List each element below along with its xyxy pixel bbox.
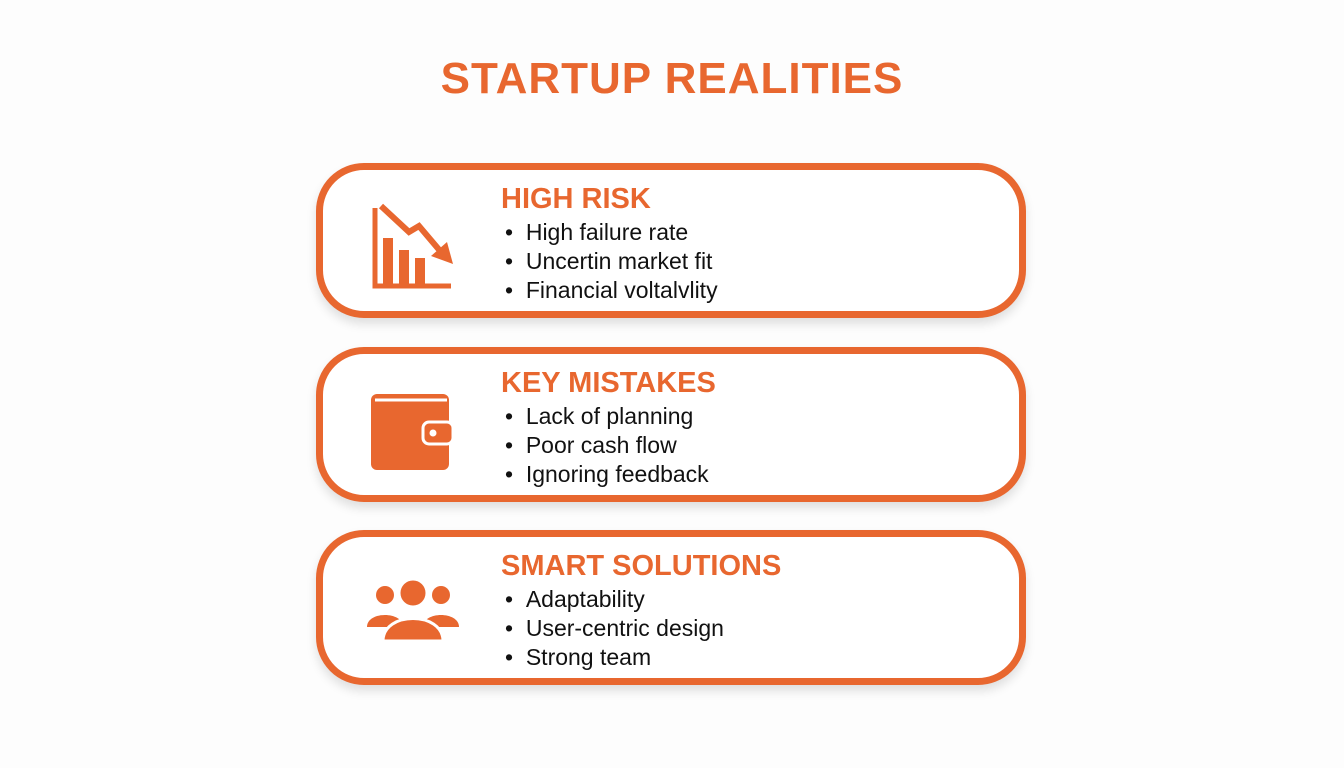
bullet list: • High failure rate	[505, 219, 688, 245]
bullet list: • Ignoring feedback	[505, 461, 709, 487]
panel: smart solutions	[316, 530, 1026, 685]
bullet list: • User-centric design	[505, 615, 724, 641]
bullet list: • Financial voltalvlity	[505, 277, 718, 303]
bullet list	[505, 586, 724, 670]
bullet list: • Adaptability	[505, 586, 645, 612]
bullet list: • Poor cash flow	[505, 432, 677, 458]
bullet list: • Lack of planning	[505, 403, 693, 429]
icon: team	[367, 580, 459, 640]
panel: key mistakes	[316, 347, 1026, 502]
bullet list	[505, 403, 709, 487]
heading: SMART SOLUTIONS	[501, 550, 781, 582]
bullet list	[505, 219, 718, 303]
panel: high risk	[316, 163, 1026, 318]
heading: HIGH RISK	[501, 183, 651, 215]
title: STARTUP REALITIES	[441, 54, 903, 103]
bullet list: • Strong team	[505, 644, 651, 670]
heading: KEY MISTAKES	[501, 367, 716, 399]
bullet list: • Uncertin market fit	[505, 248, 712, 274]
icon: wallet	[371, 394, 452, 470]
icon: declining chart	[372, 204, 453, 288]
